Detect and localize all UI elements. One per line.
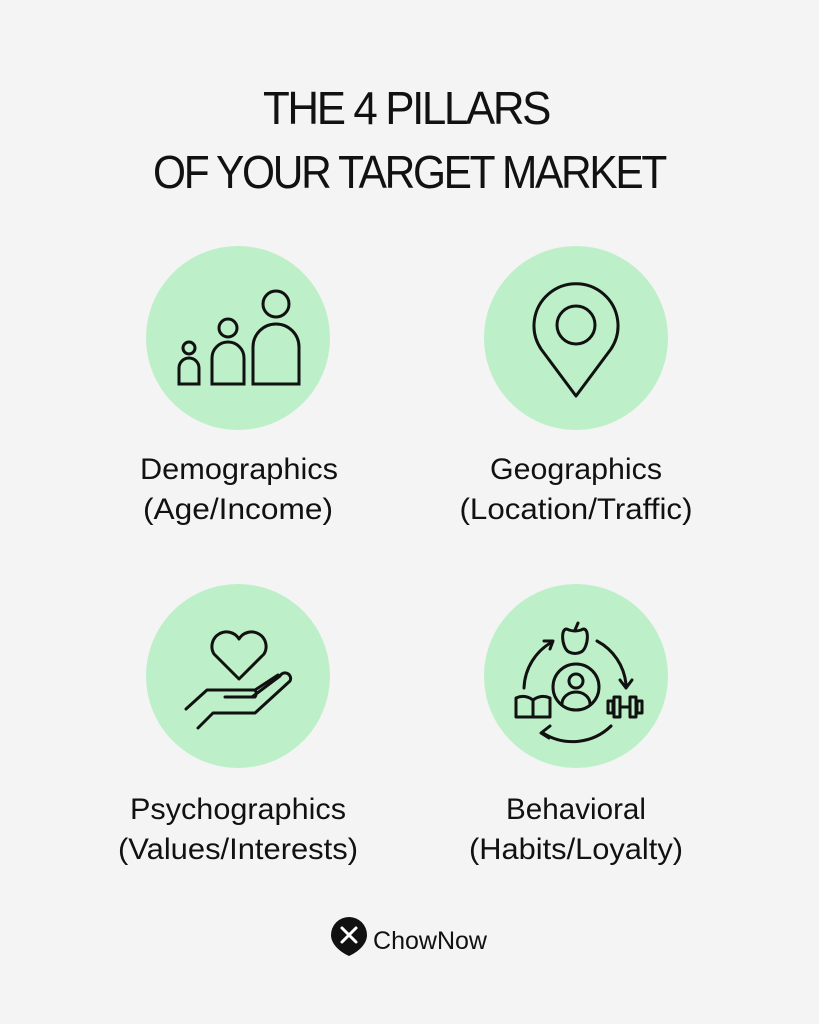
logo: ChowNow [331, 917, 488, 956]
icon: location pin [484, 246, 668, 430]
icon: people [146, 246, 330, 430]
icon: habit cycle [484, 584, 668, 768]
text: geographics label [460, 453, 692, 526]
title: OF YOUR TARGET MARKET [153, 146, 667, 198]
text: psychographics label: (Values/Interests) [118, 833, 358, 866]
title [153, 82, 667, 198]
icon: heart in hand [146, 584, 330, 768]
text: demographics label [140, 453, 338, 526]
text: behavioral label: Behavioral [506, 793, 646, 826]
text: behavioral label: (Habits/Loyalty) [469, 833, 683, 866]
panel: behavioral [469, 584, 683, 866]
text: behavioral label [469, 793, 683, 866]
text: geographics label: (Location/Traffic) [460, 493, 692, 526]
panel: psychographics [118, 584, 358, 866]
text: geographics label: Geographics [490, 453, 662, 486]
panel: geographics [460, 246, 692, 526]
text: psychographics label: Psychographics [130, 793, 346, 826]
logo: ChowNow: ChowNow [373, 927, 488, 955]
panel: demographics [140, 246, 338, 526]
title: THE 4 PILLARS [263, 82, 550, 134]
text: demographics label: (Age/Income) [143, 493, 333, 526]
text: demographics label: Demographics [140, 453, 338, 486]
text: psychographics label [118, 793, 358, 866]
